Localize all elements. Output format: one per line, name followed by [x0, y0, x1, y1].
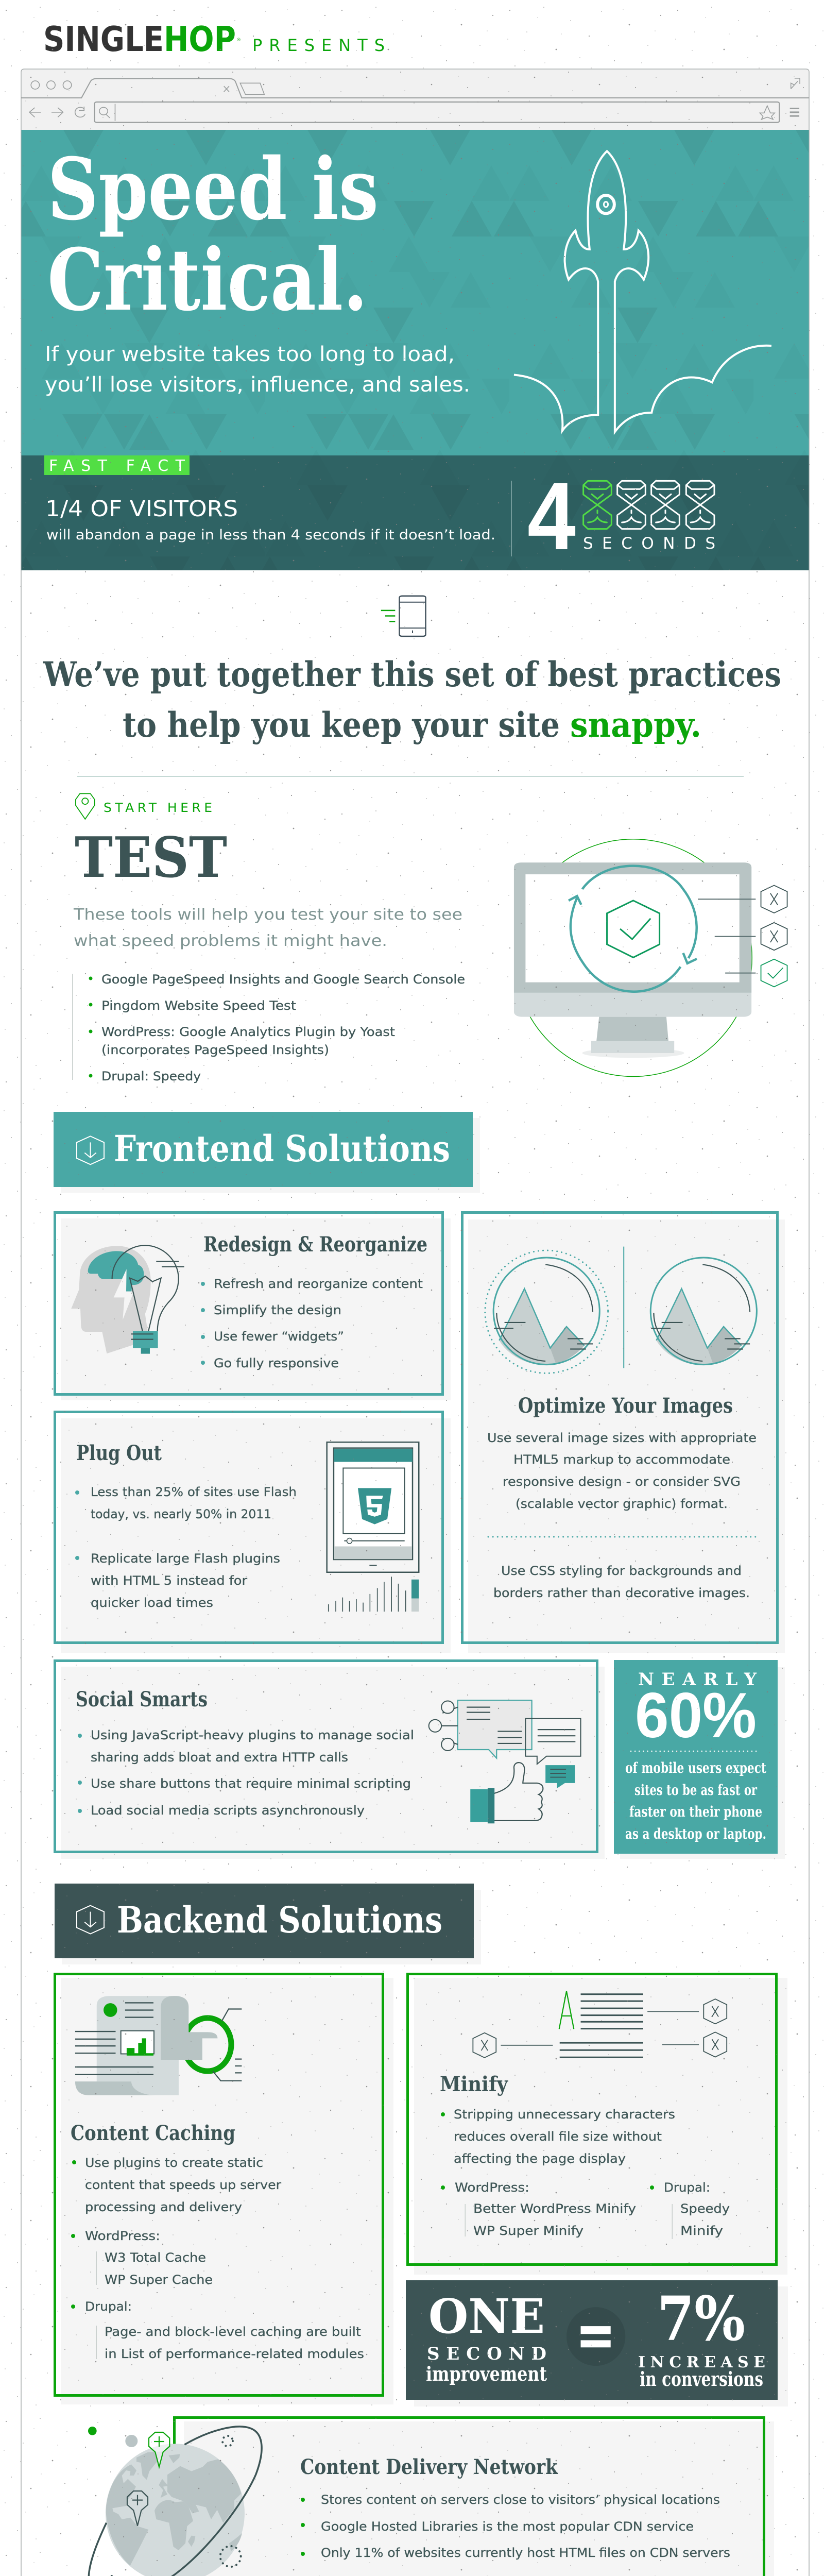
plug out list [75, 1485, 297, 1610]
panel: content caching: Content Caching [71, 2121, 235, 2145]
minify list: Speedy [680, 2201, 730, 2216]
minify list: reduces overall file size without [454, 2129, 662, 2144]
icon: tablet with html5 [327, 1442, 419, 1612]
caching list: W3 Total Cache [105, 2250, 206, 2265]
hero panel [22, 130, 809, 455]
callout: nearly 60 percent: as a desktop or laptop. [625, 1825, 766, 1842]
icon: location pin [76, 793, 95, 819]
icon: phone with speed lines [381, 596, 426, 636]
caching list: Use plugins to create static [85, 2156, 263, 2170]
callout: nearly 60 percent: NEARLY [638, 1669, 757, 1690]
cdn list: Only 11% of websites currently host HTML files on CDN servers [321, 2546, 730, 2560]
panel: social smarts [55, 1661, 605, 1859]
panel: redesign and reorganize [55, 1213, 451, 1400]
hero subtitle: If your website takes too long to load, [45, 343, 455, 366]
panel: plug out [55, 1412, 451, 1653]
test intro: These tools will help you test your site to see [73, 906, 462, 924]
test tools list: Google PageSpeed Insights and Google Search Console [101, 972, 465, 987]
callout: nearly 60 percent: faster on their phone [629, 1803, 762, 1820]
icon: head and light bulb [71, 1245, 184, 1354]
plug out list: today, vs. nearly 50% in 2011 [91, 1507, 271, 1521]
plug out list: Less than 25% of sites use Flash [91, 1485, 297, 1499]
cdn list: Google Hosted Libraries is the most popular CDN service [321, 2519, 694, 2534]
main headline [43, 654, 781, 745]
panel: plug out: Plug Out [76, 1441, 162, 1465]
social list: Load social media scripts asynchronously [91, 1803, 365, 1818]
panel: content delivery network [88, 2417, 774, 2576]
optimize text [487, 1431, 757, 1600]
start here label: START HERE [104, 800, 212, 815]
panel: minify: Minify [440, 2072, 509, 2096]
test heading: TEST [75, 825, 227, 890]
panel: content caching [55, 1974, 393, 2404]
test tools list: (incorporates PageSpeed Insights) [101, 1043, 329, 1057]
icon: document and magnifier [75, 1996, 242, 2095]
icon: down arrow hexagon [77, 1906, 104, 1934]
icon: rocket [514, 151, 771, 432]
banner: backend solutions: Backend Solutions [117, 1899, 442, 1941]
callout: nearly 60 percent [614, 1660, 785, 1859]
logo: SingleHop presents [43, 19, 385, 59]
redesign list: Use fewer “widgets” [214, 1329, 344, 1344]
caching list: processing and delivery [85, 2200, 242, 2214]
optimize text: Use several image sizes with appropriate [487, 1431, 757, 1445]
illustration: globe with pins [88, 2427, 262, 2576]
caching list [71, 2156, 364, 2361]
logo: SingleHop presents: HOP [164, 19, 236, 59]
caching list: in List of performance-related modules [105, 2347, 364, 2361]
minify list: Drupal: [664, 2180, 710, 2195]
caching list: Drupal: [85, 2299, 132, 2314]
main headline: snappy. [570, 705, 701, 745]
fast fact statement [45, 496, 495, 543]
hero title: Speed is [47, 139, 379, 239]
panel: content delivery network: Content Delivery Network [300, 2455, 558, 2479]
test tools list [72, 972, 465, 1083]
redesign list: Refresh and reorganize content [214, 1277, 423, 1291]
plug out list: quicker load times [91, 1596, 213, 1610]
hero subtitle: you’ll lose visitors, influence, and sales. [45, 373, 470, 397]
caching list: WP Super Cache [105, 2273, 213, 2287]
callout: one second equals 7 percent: 7% [657, 2283, 745, 2354]
minify list: WP Super Minify [473, 2224, 583, 2238]
icon: chat bubbles and thumbs up [429, 1700, 581, 1823]
callout: one second equals 7 percent: ONE [428, 2289, 545, 2344]
panel: redesign and reorganize: Redesign & Reorganize [203, 1232, 427, 1257]
minify list: affecting the page display [454, 2151, 626, 2166]
optimize text: borders rather than decorative images. [493, 1586, 750, 1600]
logo: SingleHop presents: PRESENTS [252, 36, 385, 55]
banner: frontend solutions: Frontend Solutions [114, 1127, 450, 1170]
hero title: Critical. [47, 230, 368, 330]
callout: one second equals 7 percent: in conversions [640, 2367, 763, 2391]
4 seconds stat [527, 463, 715, 570]
icon: down arrow hexagon [77, 1136, 104, 1164]
social list: sharing adds bloat and extra HTTP calls [91, 1750, 348, 1765]
fast fact statement: 1/4 OF VISITORS [45, 496, 238, 522]
banner: frontend solutions [54, 1112, 480, 1193]
callout: one second equals 7 percent: improvement [426, 2362, 547, 2385]
plug out list: Replicate large Flash plugins [91, 1551, 280, 1566]
callout: nearly 60 percent: 60% [635, 1680, 757, 1751]
social list: Use share buttons that require minimal scripting [91, 1776, 411, 1791]
optimize text: (scalable vector graphic) format. [516, 1497, 728, 1511]
redesign list: Go fully responsive [214, 1356, 339, 1370]
panel: optimize your images [462, 1213, 785, 1653]
test intro [73, 906, 462, 950]
cdn list: Stores content on servers close to visitors’ physical locations [321, 2493, 720, 2507]
panel: optimize your images: Optimize Your Images [518, 1394, 733, 1418]
logo: SingleHop presents: SINGLE [43, 19, 164, 59]
main headline: to help you keep your site [123, 705, 560, 745]
icon: minified text [473, 1991, 727, 2058]
social list: Using JavaScript-heavy plugins to manage social [91, 1728, 414, 1742]
icon: hourglasses [583, 481, 714, 529]
4 seconds stat: SECONDS [583, 534, 715, 553]
section: test [72, 793, 787, 1083]
panel: minify [408, 1974, 787, 2275]
fast fact band [22, 455, 809, 570]
test tools list: Drupal: Speedy [101, 1069, 201, 1083]
illustration: monitor test [514, 839, 787, 1076]
test intro: what speed problems it might have. [74, 932, 387, 950]
hero title [47, 139, 379, 330]
browser toolbar icons [21, 78, 809, 123]
fast fact tag: FAST FACT [49, 457, 185, 475]
minify list: Better WordPress Minify [473, 2201, 636, 2216]
logo: SingleHop presents: ® [236, 38, 241, 43]
icon: mountain image circles [485, 1247, 757, 1373]
hero subtitle [45, 343, 470, 397]
callout: one second equals 7 percent: SECOND [427, 2344, 546, 2364]
fast fact statement: will abandon a page in less than 4 seconds if it doesn’t load. [46, 527, 495, 543]
minify list: Stripping unnecessary characters [454, 2107, 675, 2122]
social list [78, 1728, 414, 1818]
callout: one second equals 7 percent: INCREASE [638, 2353, 765, 2371]
callout: one second equals 7 percent [406, 2280, 788, 2406]
optimize text: responsive design - or consider SVG [503, 1475, 741, 1489]
callout: nearly 60 percent: sites to be as fast or [634, 1782, 758, 1799]
cdn list [301, 2493, 730, 2560]
redesign list [201, 1277, 423, 1370]
test tools list: Pingdom Website Speed Test [101, 998, 296, 1013]
caching list: Page- and block-level caching are built [105, 2325, 361, 2339]
test tools list: WordPress: Google Analytics Plugin by Yoast [101, 1025, 395, 1039]
optimize text: HTML5 markup to accommodate [513, 1452, 730, 1467]
4 seconds stat: 4 [527, 463, 576, 570]
minify list: WordPress: [455, 2180, 529, 2195]
caching list: WordPress: [85, 2229, 160, 2243]
plug out list: with HTML 5 instead for [91, 1573, 247, 1588]
redesign list: Simplify the design [214, 1303, 341, 1317]
callout: nearly 60 percent: of mobile users expect [625, 1759, 766, 1776]
panel: social smarts: Social Smarts [76, 1687, 208, 1711]
equals sign [566, 2307, 625, 2366]
minify list: Minify [680, 2224, 723, 2238]
minify list [441, 2107, 730, 2239]
optimize text: Use CSS styling for backgrounds and [501, 1564, 742, 1578]
banner: backend solutions [55, 1884, 481, 1964]
caching list: content that speeds up server [85, 2178, 281, 2192]
